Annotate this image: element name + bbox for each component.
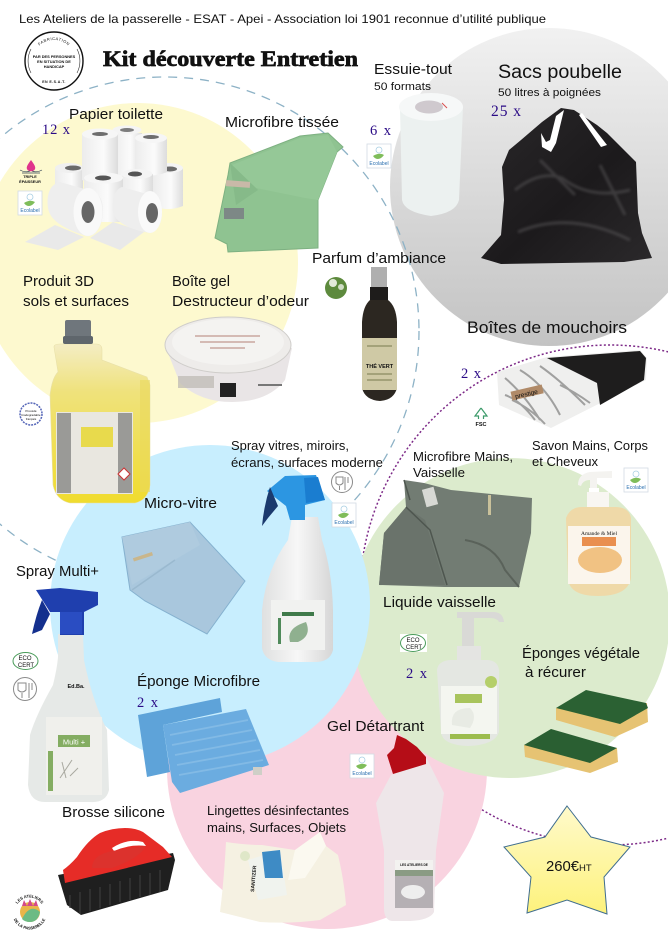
label: spray vitres: écrans, surfaces moderne	[231, 456, 383, 470]
label: spray multi: Spray Multi+	[16, 564, 99, 580]
label: lingettes: Lingettes désinfectantes	[207, 804, 349, 818]
product: grey microfibre cloth	[379, 480, 532, 587]
label: brosse silicone: Brosse silicone	[62, 805, 165, 821]
icon: ecocert: CERT	[18, 663, 34, 669]
label: spray vitres	[231, 439, 383, 470]
stamp: fabrication par des personnes en situation de handicap: FABRICATION	[38, 37, 70, 46]
quantity: 12 x: 12 x	[42, 122, 71, 138]
logo: les ateliers de la passerelle: DE LA PASSERELLE	[14, 918, 46, 930]
label: papier toilette: Papier toilette	[69, 107, 163, 123]
icon: ecolabel	[350, 754, 374, 778]
label: eponges vegetale	[522, 645, 640, 681]
label: spray vitres: Spray vitres, miroirs,	[231, 439, 349, 453]
callout: price star: HT	[579, 863, 592, 874]
icon: FSC: FSC	[476, 422, 487, 428]
quantity: 2 x: 2 x	[461, 366, 482, 382]
icon: triple epaisseur	[19, 160, 42, 184]
product: plant sponges	[524, 690, 648, 773]
icon: ecolabel: Ecolabel	[352, 771, 372, 777]
product: spray multi+	[28, 588, 109, 802]
product: black trash bag	[481, 108, 652, 264]
background circle: yellow	[0, 103, 298, 423]
stamp: fabrication par des personnes en situation de handicap	[24, 31, 84, 91]
header line: Les Ateliers de la passerelle - ESAT - Apei - Association loi 1901 reconnue d’utilité publique	[19, 12, 546, 26]
icon: triple epaisseur: ÉPAISSEUR	[19, 179, 41, 184]
label: produit 3D	[23, 274, 129, 310]
product: spray multi+: Ed.Ba.	[67, 684, 85, 690]
quantity: 6 x: 6 x	[370, 123, 392, 139]
product: red silicone brush	[58, 828, 175, 915]
label: eponge microfibre: Éponge Microfibre	[137, 673, 260, 690]
stamp: fabrication par des personnes en situation de handicap: PAR DES PERSONNES	[33, 54, 76, 59]
product: honey soap bottle: Amande & Miel	[581, 531, 617, 537]
product: toilet descaling gel	[376, 735, 444, 921]
icon: ecocert	[13, 652, 38, 670]
label: savon mains	[532, 439, 648, 469]
label: microfibre mains vaisselle: Microfibre Mains,	[413, 450, 513, 464]
product: toilet descaling gel: LES ATELIERS DE	[400, 863, 428, 867]
label: boite gel: Destructeur d’odeur	[172, 294, 309, 310]
callout: price star: 260€	[546, 858, 580, 875]
label: microfibre mains vaisselle: Vaisselle	[413, 466, 465, 480]
product: dish liquid bottle	[437, 612, 504, 746]
icon: ecocert	[400, 634, 427, 652]
label: eponges vegetale: Éponges végétale	[522, 645, 640, 662]
callout: price star	[504, 806, 630, 914]
product: blue microfibre sponges	[138, 698, 269, 793]
icon: ecolabel: Ecolabel	[20, 208, 40, 214]
product: tissue box	[497, 350, 647, 428]
stamp: fabrication par des personnes en situation de handicap: EN SITUATION DE	[37, 59, 71, 64]
product: honey soap bottle	[566, 471, 631, 596]
product: gel box	[165, 317, 292, 402]
product: ambient perfume spray	[362, 267, 397, 401]
background circle: grey	[390, 28, 668, 346]
icon: french label: Procédé	[25, 409, 37, 413]
product: disinfectant wipes: SANITIZER	[250, 865, 258, 892]
logo: les ateliers de la passerelle	[14, 894, 46, 930]
stamp: fabrication par des personnes en situation de handicap: HANDICAP	[44, 64, 65, 69]
dotted purple ring	[360, 345, 668, 845]
label: 50 formats: 50 formats	[374, 81, 432, 93]
icon: french label: biodégradable	[21, 413, 41, 417]
label: essuie-tout: Essuie-tout	[374, 61, 453, 78]
label: boite gel	[172, 274, 309, 310]
label: lingettes	[207, 804, 349, 835]
product: toilet paper rolls	[25, 126, 183, 250]
stamp: fabrication par des personnes en situation de handicap: EN E.S.A.T.	[42, 80, 66, 84]
product: disinfectant wipes	[220, 832, 346, 923]
label: 50 litres a poignees: 50 litres à poignées	[498, 87, 602, 99]
label: micro-vitre: Micro-vitre	[144, 496, 217, 512]
background circle: blue	[50, 445, 370, 765]
product: paper towel roll	[399, 93, 463, 216]
background circle: pink	[167, 609, 487, 929]
product: window spray	[262, 475, 333, 662]
icon: ecocert: ECO	[18, 656, 32, 662]
quantity: 25 x: 25 x	[491, 103, 521, 120]
product: yellow 3D bottle	[50, 320, 150, 503]
label: lingettes: mains, Surfaces, Objets	[207, 821, 346, 835]
icon: ecolabel: Ecolabel	[334, 520, 354, 526]
label: boites de mouchoirs: Boîtes de mouchoirs	[467, 319, 627, 337]
icon: food safe	[14, 678, 36, 700]
icon: ecocert: CERT	[406, 645, 422, 651]
label: liquide vaisselle: Liquide vaisselle	[383, 595, 496, 611]
label: boite gel: Boîte gel	[172, 274, 230, 290]
icon: food safe	[332, 472, 352, 492]
icon: ecolabel	[624, 468, 648, 492]
label: savon mains: Savon Mains, Corps	[532, 439, 648, 453]
quantity: 2 x: 2 x	[406, 666, 428, 682]
icon: french label: français	[26, 417, 37, 421]
product: blue glass cloth	[122, 522, 245, 634]
label: parfum d'ambiance: Parfum d’ambiance	[312, 251, 446, 267]
label: microfibre tissee: Microfibre tissée	[225, 115, 339, 131]
title: Kit découverte Entretien	[103, 46, 358, 71]
icon: ecocert: ECO	[406, 638, 420, 644]
label: eponges vegetale: à récurer	[525, 665, 586, 681]
product: tissue box: prestige	[515, 389, 539, 401]
label: savon mains: et Cheveux	[532, 455, 599, 469]
label: microfibre mains vaisselle	[413, 450, 513, 480]
icon: ecolabel	[332, 503, 356, 527]
background circle: green	[350, 458, 668, 778]
label: produit 3D: sols et surfaces	[23, 294, 129, 310]
label: sacs poubelle: Sacs poubelle	[498, 62, 622, 83]
logo: les ateliers de la passerelle: LES ATELIERS	[15, 894, 44, 904]
product: spray multi+: Multi +	[63, 738, 86, 746]
icon: ecolabel	[18, 191, 42, 215]
icon: french label	[20, 403, 42, 425]
icon: ecolabel: Ecolabel	[369, 161, 389, 167]
label: gel detartrant: Gel Détartrant	[327, 719, 424, 735]
icon: FSC	[475, 408, 487, 428]
label: produit 3D: Produit 3D	[23, 274, 94, 290]
dashed blue ring	[0, 77, 419, 585]
product: green microfibre cloth	[215, 133, 343, 252]
quantity: 2 x: 2 x	[137, 695, 159, 711]
icon: ecolabel: Ecolabel	[626, 485, 646, 491]
icon: ecolabel	[367, 144, 391, 168]
product: ambient perfume spray: THÉ VERT	[366, 362, 394, 370]
icon: globe and leaves	[325, 277, 347, 299]
icon: triple epaisseur: TRIPLE	[23, 175, 37, 179]
